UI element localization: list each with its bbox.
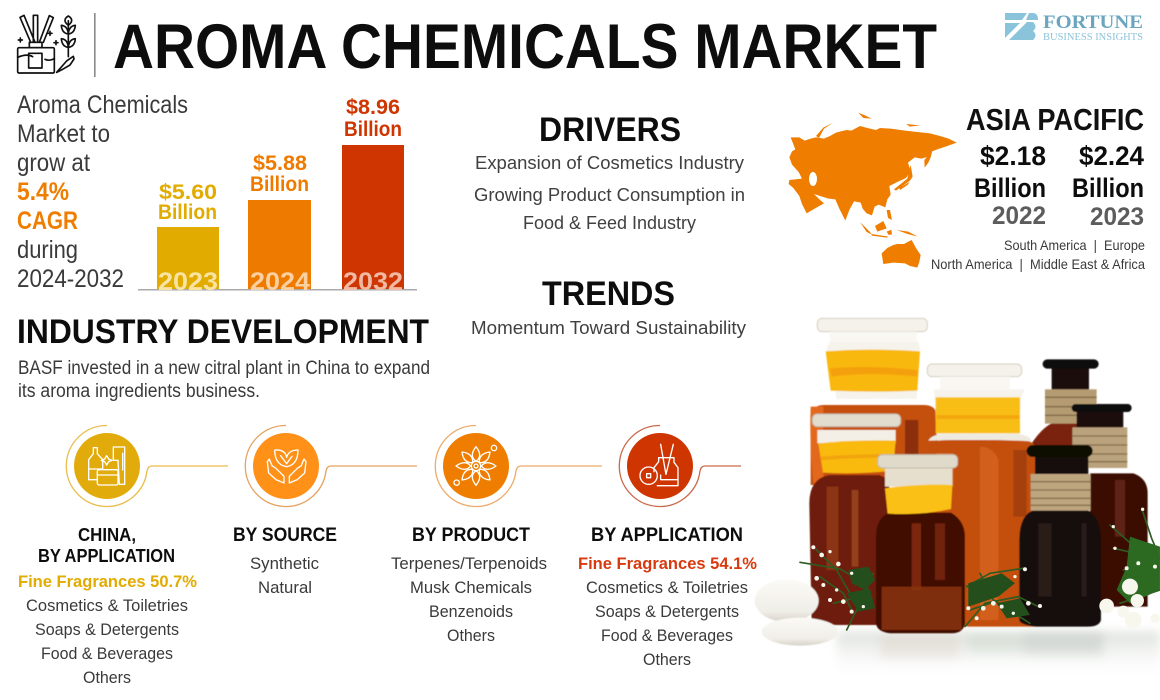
panel: industry development — [17, 313, 430, 402]
panel: drivers: DRIVERS — [539, 111, 681, 149]
panel: by product — [391, 525, 547, 645]
icon: diffuser circle — [619, 425, 741, 506]
jar: center — [927, 364, 1037, 627]
panel: China by application: Cosmetics & Toiletries — [26, 596, 188, 615]
text block: CAGR summary: during — [17, 236, 78, 264]
panel: China by application: Fine Fragrances 50.7% — [18, 572, 197, 591]
panel: by application: Cosmetics & Toiletries — [586, 578, 748, 597]
logo: Fortune Business Insights: FORTUNE — [1043, 12, 1143, 33]
panel: industry development: its aroma ingredients business. — [18, 381, 260, 402]
panel: drivers: Food & Feed Industry — [523, 213, 696, 233]
panel: Asia Pacific values: Billion — [974, 173, 1046, 203]
bar chart: market size: $8.96 — [346, 96, 400, 119]
panel: by product: Benzenoids — [429, 602, 513, 621]
text block: CAGR summary: Market to — [17, 120, 110, 148]
icon: hands and leaves circle — [245, 425, 417, 506]
title: AROMA CHEMICALS MARKET — [113, 12, 937, 82]
bar chart: market size: Billion — [158, 201, 217, 224]
panel: by application: Others — [643, 650, 691, 669]
jar: front left — [809, 414, 901, 625]
map: Asia Pacific — [789, 113, 957, 268]
jar: front dark — [1019, 445, 1101, 627]
panel: by source: BY SOURCE — [233, 525, 337, 546]
text block: CAGR summary — [17, 91, 188, 293]
text block: CAGR summary: Aroma Chemicals — [17, 91, 188, 119]
panel: China by application: CHINA, — [78, 525, 136, 545]
logo: Fortune Business Insights — [1005, 12, 1143, 43]
panel: Asia Pacific values: South America | Europe — [1004, 237, 1145, 253]
stones — [755, 579, 838, 646]
panel: Asia Pacific values: $2.24 — [1079, 141, 1144, 171]
panel: industry development: INDUSTRY DEVELOPMENT — [17, 313, 429, 351]
panel: drivers: Expansion of Cosmetics Industry — [475, 153, 744, 173]
panel: by application: Fine Fragrances 54.1% — [578, 554, 757, 573]
panel: drivers: Growing Product Consumption in — [474, 185, 745, 205]
panel: Asia Pacific values: North America | Middle East & Africa — [931, 256, 1145, 272]
logo: Fortune Business Insights: BUSINESS INSIGHTS — [1043, 32, 1143, 43]
bar chart: market size: 2024 — [250, 268, 310, 296]
bar chart: market size: $5.88 — [253, 152, 307, 175]
greenery: middle sprig — [965, 567, 1042, 630]
panel: Asia Pacific values: 2023 — [1090, 203, 1144, 231]
bar chart: market size: Billion — [250, 173, 309, 196]
bar chart: market size: $5.60 — [159, 181, 217, 204]
text block: CAGR summary: CAGR — [17, 207, 78, 235]
panel: by application — [578, 525, 757, 669]
panel: China by application: Others — [83, 668, 131, 687]
greenery: right sprig — [1099, 508, 1160, 628]
bar chart: market size: Billion — [344, 118, 402, 141]
panel: by product: Terpenes/Terpenoids — [391, 554, 547, 573]
panel: trends: Momentum Toward Sustainability — [471, 318, 746, 338]
greenery: left sprig — [800, 545, 875, 630]
panel: China by application: BY APPLICATION — [38, 546, 175, 566]
panel: by source: Synthetic — [250, 554, 319, 573]
panel: Asia Pacific values: $2.18 — [980, 141, 1046, 171]
panel: by source: Natural — [258, 578, 312, 597]
panel: by product: BY PRODUCT — [412, 525, 530, 546]
panel: by product: Others — [447, 626, 495, 645]
panel: Asia Pacific values: 2022 — [992, 202, 1046, 230]
text block: CAGR summary: 5.4% — [17, 178, 69, 206]
icon: flower circle — [435, 425, 602, 506]
jar: front small — [876, 455, 965, 633]
panel: trends — [471, 275, 746, 338]
text block: CAGR summary: grow at — [17, 149, 90, 177]
icon: cosmetics circle — [66, 425, 228, 506]
panel: by application: Soaps & Detergents — [595, 602, 739, 621]
panel: by source — [233, 525, 337, 597]
jar: right — [1072, 404, 1148, 607]
bar chart: market size — [138, 96, 417, 296]
panel: Asia Pacific values — [931, 102, 1145, 272]
jar: back right dark — [1032, 359, 1099, 467]
icon: reed diffuser and lavender — [18, 15, 75, 73]
panel: China by application: Food & Beverages — [41, 644, 173, 663]
text block: CAGR summary: 2024-2032 — [17, 265, 124, 293]
photo: aroma oil jars — [755, 318, 1160, 682]
bar chart: market size: 2032 — [343, 268, 403, 296]
panel: trends: TRENDS — [542, 275, 675, 313]
panel: Asia Pacific values: Billion — [1072, 173, 1144, 203]
reflection — [837, 632, 1160, 682]
panel: drivers — [474, 111, 745, 233]
bar chart: market size: 2023 — [158, 268, 218, 296]
panel: by application: BY APPLICATION — [591, 525, 743, 546]
panel: by product: Musk Chemicals — [410, 578, 532, 597]
panel: China by application — [18, 525, 197, 687]
panel: China by application: Soaps & Detergents — [35, 620, 179, 639]
jar: back left — [810, 318, 938, 485]
panel: by application: Food & Beverages — [601, 626, 733, 645]
panel: industry development: BASF invested in a new citral plant in China to expand — [18, 358, 430, 379]
